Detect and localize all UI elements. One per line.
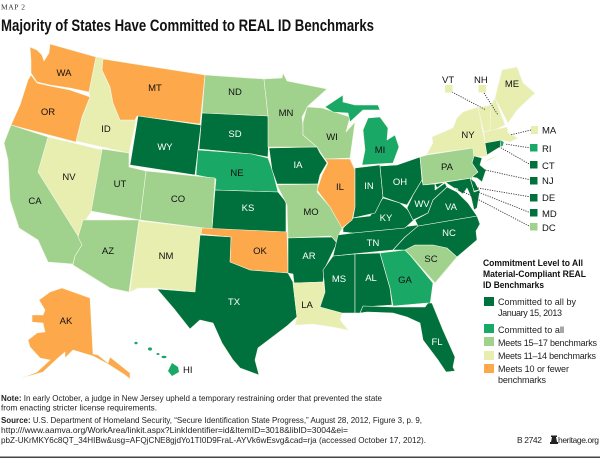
callout: CT: CT xyxy=(542,161,555,172)
state labels: IA xyxy=(294,160,303,171)
state labels: LA xyxy=(301,300,313,311)
state labels: NV xyxy=(62,172,76,183)
state labels: AL xyxy=(365,273,377,284)
state labels: VA xyxy=(445,202,458,213)
state labels: WI xyxy=(326,132,338,143)
state labels: MS xyxy=(332,274,346,285)
callout: MA: MA xyxy=(542,126,557,136)
state labels: IN xyxy=(364,181,374,192)
state labels: MT xyxy=(148,83,162,94)
title: Majority of States Have Committed to REAL ID Benchmarks xyxy=(1,16,374,35)
source text: http:///www.aamva.org/WorkArea/linkit.aspx?LinkIdentifier=id&ItemID=3018&libID=3004&ei= xyxy=(1,425,348,435)
legend item: 15-17: Meets 15–17 benchmarks xyxy=(498,338,598,348)
note text: Note: In early October, a judge in New Jersey upheld a temporary restraining order that prevented the state xyxy=(1,393,382,403)
state labels xyxy=(28,68,519,348)
callout: RI xyxy=(530,144,552,155)
callout: DE xyxy=(530,193,555,204)
state labels: KY xyxy=(380,213,393,224)
state labels: UT xyxy=(114,179,127,190)
state labels: MN xyxy=(279,108,294,119)
legend title: Material-Compliant REAL xyxy=(483,269,586,279)
state labels: AK xyxy=(60,316,73,327)
map number label: MAP 2 xyxy=(1,2,25,12)
legend title xyxy=(483,258,586,290)
source text: pbZ-UKrMKY6c8QT_34HIBw&usg=AFQjCNE8gjdYo1TI0D9FraL-AYVk6wEsvg&cad=rja (accessed October 17, 2012). xyxy=(1,435,426,445)
icon: liberty bell xyxy=(550,436,558,444)
credit: heritage.org: heritage.org xyxy=(558,435,599,445)
callout: RI: RI xyxy=(542,144,552,155)
state labels: AR xyxy=(302,251,316,262)
callout: VT xyxy=(442,75,454,92)
callout: DC xyxy=(530,223,556,234)
legend xyxy=(483,258,598,385)
state labels: ND xyxy=(228,87,242,98)
callout: MA xyxy=(531,126,557,136)
state labels: TX xyxy=(228,297,241,308)
state labels: SC xyxy=(424,254,438,265)
leader lines xyxy=(452,92,531,227)
state labels: NE xyxy=(230,168,244,179)
state labels: MI xyxy=(375,145,385,156)
legend item: committed to all: Committed to all xyxy=(498,325,564,335)
state labels: IL xyxy=(336,182,344,193)
callout: MD: MD xyxy=(542,209,557,220)
state labels: SD xyxy=(228,129,242,140)
callout: NJ: NJ xyxy=(542,176,554,187)
state labels: MO xyxy=(303,207,319,218)
state labels: ID xyxy=(101,124,111,135)
callout: NH xyxy=(474,75,488,92)
credit: report number: B 2742 xyxy=(517,435,542,445)
state labels: NM xyxy=(159,251,173,262)
choropleth map of US states xyxy=(4,44,535,379)
state labels: GA xyxy=(398,275,413,286)
state labels: WV xyxy=(414,199,430,210)
state labels: NY xyxy=(461,130,475,141)
state labels: ME xyxy=(505,79,519,90)
Hawaii xyxy=(134,342,179,376)
state labels: TN xyxy=(367,238,379,249)
callout: CT xyxy=(530,161,555,172)
source text xyxy=(1,415,426,445)
note text: from enacting stricter license requirements. xyxy=(1,402,157,412)
legend item: committed by date: Committed to all by xyxy=(498,297,576,307)
state labels: AZ xyxy=(102,246,114,257)
state labels: OK xyxy=(253,246,268,257)
Alaska xyxy=(22,288,130,379)
legend item: 10 or fewer xyxy=(484,364,569,385)
label: Hawaii: HI xyxy=(183,365,192,376)
state labels: KS xyxy=(242,203,254,214)
legend title: Commitment Level to All xyxy=(483,258,583,268)
state labels: CA xyxy=(28,196,42,207)
state labels: OH xyxy=(393,177,407,188)
legend title: ID Benchmarks xyxy=(483,280,544,290)
state labels: CO xyxy=(171,194,185,205)
callout: DE: DE xyxy=(542,193,555,204)
state labels: FL xyxy=(431,337,443,348)
callout: DC: DC xyxy=(542,223,556,234)
callout: NH: NH xyxy=(474,75,488,86)
state labels: OR xyxy=(41,107,55,118)
callout: VT: VT xyxy=(442,75,454,86)
state labels: PA xyxy=(441,162,454,173)
callout: MD xyxy=(530,209,557,220)
legend item: 10 or fewer: Meets 10 or fewer xyxy=(498,364,569,374)
legend item: 10 or fewer: benchmarks xyxy=(498,375,546,385)
legend item: committed by date xyxy=(484,297,576,318)
state labels: WY xyxy=(157,142,173,153)
source text: Source: U.S. Department of Homeland Security, “Secure Identification State Progress,” August 28, 2012, Figure 3, p. 9, xyxy=(1,415,422,425)
bottom rule xyxy=(0,456,600,458)
legend item: committed by date: January 15, 2013 xyxy=(498,308,562,318)
note text xyxy=(1,393,382,412)
legend item: 11-14: Meets 11–14 benchmarks xyxy=(498,351,596,361)
state labels: NC xyxy=(442,228,456,239)
callout: NJ xyxy=(530,176,554,187)
state labels: WA xyxy=(57,68,72,79)
